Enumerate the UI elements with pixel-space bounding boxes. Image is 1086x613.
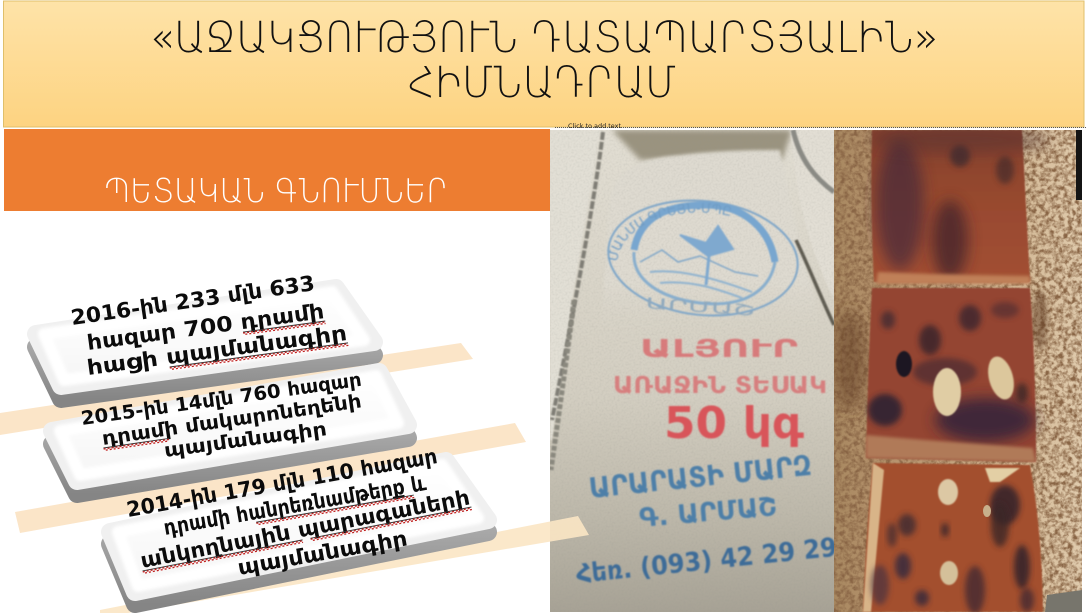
text: 2015 line 3: պայմանագիր — [163, 418, 328, 462]
sack label: red text: ԱԼՅՈՒՐ — [640, 334, 799, 363]
placeholder: click to add text: Click to add text — [568, 122, 621, 130]
logo stamp — [606, 198, 800, 318]
sack label: red text: 50 կգ — [664, 398, 804, 449]
strip: behind card 2 — [15, 423, 526, 533]
text: 2014 line 1: 2014-ին 179 մլն 110 հազար — [125, 444, 439, 522]
logo stamp: ՄԱՆՄԱ ԳՐԵՅՆ-ՄՊԸ — [608, 206, 730, 261]
card: 2015 contract — [52, 369, 408, 494]
text: 2014 line 2: դրամի հանրեռնամթերք և — [162, 471, 428, 540]
sack label: blue text — [576, 454, 834, 584]
title line 2: ՀԻՄՆԱԴՐԱՄ — [408, 58, 676, 108]
text: 2016 line 3: հացի պայմանագիր — [85, 321, 348, 380]
heading: state purchases: ՊԵՏԱԿԱՆ ԳՆՈՒՄՆԵՐ — [104, 171, 448, 210]
bread slice 3 — [863, 463, 1043, 613]
panel: orange heading — [4, 129, 550, 211]
text: 2015 line 1: 2015-ին 14մլն 760 հազար — [80, 369, 363, 430]
bread slice 1 — [870, 126, 1050, 284]
nut: large — [933, 368, 961, 416]
sack label: red text — [613, 334, 827, 449]
text: 2014 line 3: անկողնային պարագաների — [138, 485, 472, 573]
card: 2014 contract — [110, 444, 488, 604]
title line 1: «ԱՋԱԿՑՈՒԹՅՈՒՆ ԴԱՏԱՊԱՐՏՅԱԼԻՆ» — [150, 13, 938, 63]
sack label: blue text: Գ. ԱՐՄԱՇ — [638, 492, 778, 534]
photo: flour sack — [550, 130, 834, 612]
sack label: red text: ԱՌԱՋԻՆ ՏԵՍԱԿ — [613, 373, 827, 399]
card: 2016 contract — [36, 271, 374, 399]
strip: behind card 1 — [0, 343, 473, 435]
header banner — [4, 1, 1084, 127]
text: 2016 line 1: 2016-ին 233 մլն 633 — [69, 271, 316, 330]
logo stamp: ԱՐՄԱՇ — [645, 294, 756, 320]
photo: burnt bread — [834, 126, 1082, 613]
sack label: blue text: Հեռ. (093) 42 29 29 — [575, 533, 838, 590]
text: 2015 line 2: դրամի մակարոնեղենի — [101, 390, 363, 450]
sack label: blue text: ԱՐԱՐԱՏԻ ՄԱՐԶ — [587, 449, 814, 505]
bread slice 2 — [866, 288, 1036, 462]
nut: right — [987, 356, 1015, 400]
text: 2014 line 4: պայմանագիր — [236, 526, 409, 580]
strip: behind card 3 — [100, 516, 589, 613]
text: 2016 line 2: հազար 700 դրամի — [85, 299, 326, 355]
